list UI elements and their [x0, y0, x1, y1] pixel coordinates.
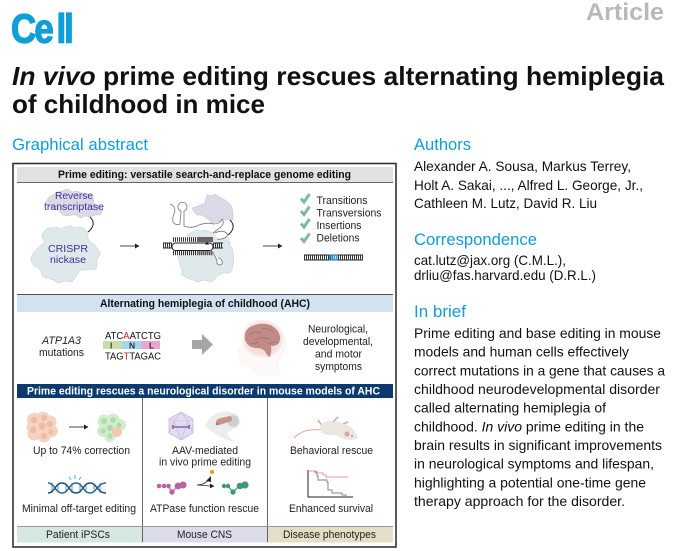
author names: [414, 159, 643, 211]
heading: correspondence: Correspondence: [414, 230, 537, 249]
text: symptoms: and motor: [315, 348, 362, 360]
summary text: childhood. In vivo prime editing in the: [414, 419, 644, 434]
section: prime editing: [17, 167, 393, 283]
DNA sequence with amino acids: [103, 330, 161, 362]
text: Behavioral rescue: [290, 445, 373, 457]
chart: survival curves: [308, 470, 353, 497]
emails: cat.lutz@jax.org (C.M.L.),: [414, 253, 566, 268]
column: disease phenotypes: [289, 417, 373, 515]
section heading: AHC: Alternating hemiplegia of childhood (AHC): [100, 298, 310, 310]
section: prime editing rescues: [17, 384, 393, 542]
text: symptoms: developmental,: [303, 336, 373, 348]
DNA sequence with amino acids: TAGTTAGAC: [105, 350, 161, 362]
section heading: prime editing: Prime editing: versatile search-and-replace genome editing: [58, 169, 351, 181]
icon: child head with brain: [238, 320, 285, 375]
text: Minimal off-target editing: [22, 503, 136, 515]
heading: in brief: In brief: [414, 302, 466, 321]
icon: edited DNA: [304, 255, 363, 260]
list: edit types with check marks: [301, 194, 382, 244]
emails: drliu@fas.harvard.edu (D.R.L.): [414, 268, 596, 283]
list: edit types with check marks: Deletions: [316, 232, 360, 244]
heading: authors: Authors: [414, 135, 471, 154]
title: of childhood in mice: [12, 89, 265, 119]
title: In vivo prime editing rescues alternating hemiplegia: [12, 61, 665, 91]
correspondence block: [414, 230, 596, 283]
illustration: reverse transcriptase fused to CRISPR nickase: Reverse: [55, 190, 93, 202]
author names: Alexander A. Sousa, Markus Terrey,: [414, 159, 631, 174]
icon: DNA helix: [48, 475, 106, 493]
authors block: [414, 135, 643, 211]
section: alternating hemiplegia of childhood: [17, 294, 393, 375]
list: edit types with check marks: Transversions: [316, 208, 382, 220]
bottom category bands: Patient iPSCs: [46, 529, 110, 541]
text: [159, 445, 251, 468]
summary text: correct mutations in a gene that causes a: [414, 363, 665, 378]
illustration: reverse transcriptase fused to CRISPR nickase: transcriptase: [44, 201, 104, 213]
label: ATP1A3 mutations: mutations: [39, 347, 84, 359]
illustration: reverse transcriptase fused to CRISPR nickase: nickase: [50, 254, 86, 266]
author names: Cathleen M. Lutz, David R. Liu: [414, 196, 597, 211]
title: [12, 61, 665, 119]
bottom category bands: Mouse CNS: [177, 529, 232, 541]
bottom category bands: [17, 526, 393, 542]
heading: graphical abstract: Graphical abstract: [12, 135, 148, 154]
text: in vivo prime editing: [159, 456, 251, 468]
summary text: therapy approach for the disorder.: [414, 494, 625, 509]
list: edit types with check marks: Transitions: [316, 195, 368, 207]
text: ATPase function rescue: [150, 503, 259, 515]
summary text: Prime editing and base editing in mouse: [414, 326, 661, 341]
summary text: [414, 326, 665, 509]
list: edit types with check marks: Insertions: [316, 220, 362, 232]
arrow: [263, 244, 282, 248]
icon: mouse on back: [294, 417, 358, 440]
icon: ATPase conformational change: [157, 470, 249, 495]
text: Enhanced survival: [289, 503, 373, 515]
DNA sequence with amino acids: L: [149, 340, 154, 350]
emails: [414, 253, 596, 283]
column: patient iPSCs: [22, 412, 136, 515]
DNA sequence with amino acids: N: [129, 340, 135, 350]
bottom category bands: Disease phenotypes: [283, 529, 376, 541]
illustration: prime editor bound to DNA: [163, 194, 234, 282]
summary text: called alternating hemiplegia of: [414, 401, 606, 416]
arrow: [120, 244, 140, 248]
DNA sequence with amino acids: ATCAATCTG: [105, 330, 161, 342]
icon: cell clusters: [26, 412, 126, 442]
panel: graphical abstract: [13, 164, 396, 547]
journal logo: Cell: Cell: [11, 7, 74, 52]
section heading: prime editing: [17, 167, 393, 182]
column: mouse CNS: [150, 412, 259, 515]
arrow: grey block: [192, 334, 213, 355]
icon: AAV capsid: [169, 412, 193, 440]
text: symptoms: [303, 324, 373, 373]
illustration: reverse transcriptase fused to CRISPR nickase: [31, 189, 104, 283]
illustration: reverse transcriptase fused to CRISPR nickase: CRISPR: [48, 243, 88, 255]
text: AAV-mediated: [172, 445, 238, 457]
summary text: highlighting a potential one-time gene: [414, 475, 646, 490]
in brief block: [414, 302, 665, 509]
label: ATP1A3 mutations: [39, 335, 84, 359]
summary text: models and human cells effectively: [414, 345, 629, 360]
section heading: AHC: [17, 294, 393, 312]
label: ATP1A3 mutations: ATP1A3: [41, 335, 81, 347]
section heading: rescue: Prime editing rescues a neurological disorder in mouse models of AHC: [27, 386, 380, 398]
author names: Holt A. Sakai, ..., Alfred L. George, Jr.,: [414, 178, 643, 193]
icon: mouse head with brain: [205, 412, 240, 442]
text: symptoms: symptoms: [315, 361, 362, 373]
summary text: brain results in significant improvements: [414, 438, 662, 453]
DNA sequence with amino acids: I: [110, 340, 112, 350]
summary text: childhood neurodevelopmental disorder: [414, 382, 660, 397]
summary text: in neurological symptoms and lifespan,: [414, 457, 654, 472]
text: Up to 74% correction: [33, 445, 130, 457]
text: symptoms: Neurological,: [308, 324, 368, 336]
